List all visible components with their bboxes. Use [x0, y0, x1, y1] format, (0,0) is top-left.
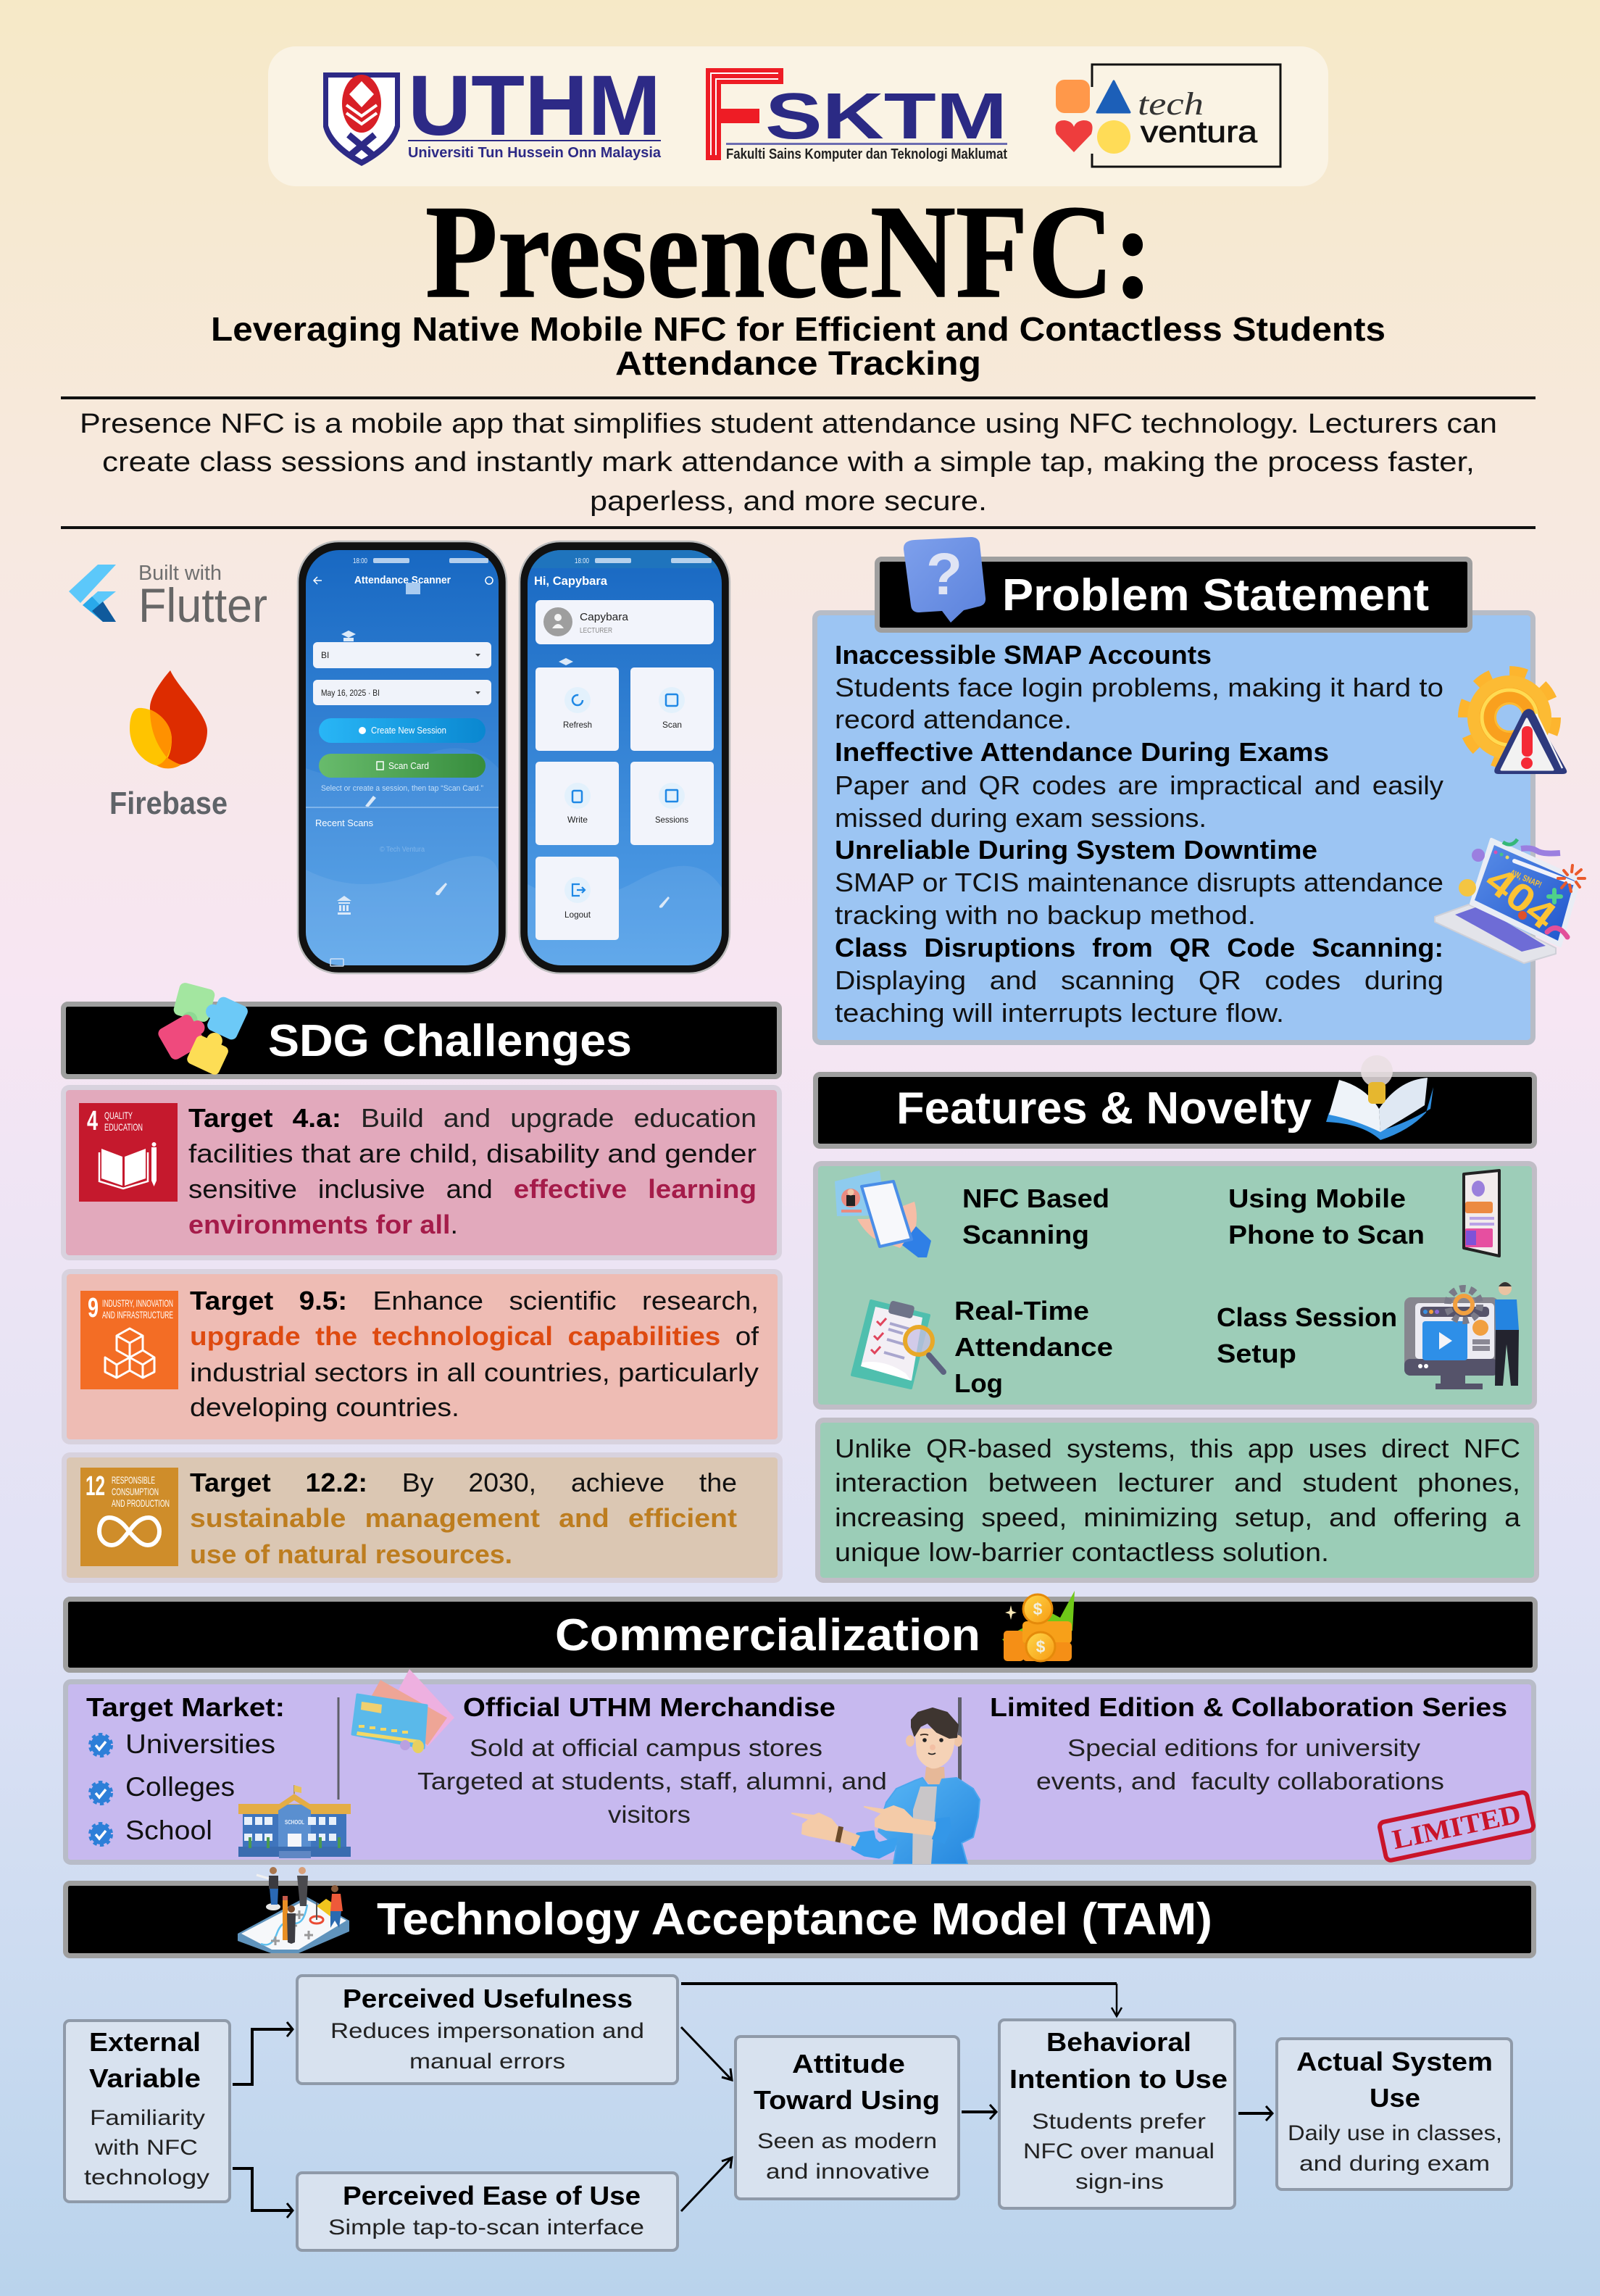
text: official merchandise — [417, 1692, 887, 1828]
problem body text: tracking with no backup method. — [835, 900, 1256, 930]
icon: 404 laptop — [1435, 839, 1585, 963]
icon: phone — [1464, 1170, 1499, 1256]
box: attitude: Toward Using — [754, 2085, 940, 2115]
arrow: external to ease of use — [233, 2168, 293, 2218]
icon: monitor and person — [1404, 1282, 1519, 1389]
problem body text — [835, 640, 1443, 1028]
profile card: LECTURER — [580, 627, 612, 635]
target market: Target Market: — [86, 1692, 285, 1722]
text: official merchandise: Sold at official campus stores — [470, 1734, 822, 1761]
logo: Firebase — [109, 670, 228, 821]
arrow: usefulness to intention — [681, 1984, 1122, 2016]
text: official merchandise: visitors — [608, 1801, 691, 1828]
text: limited edition: events, and faculty collaborations — [1036, 1768, 1444, 1794]
tile: Sessions: Sessions — [655, 815, 688, 825]
logo: tech ventura: ventura — [1141, 115, 1258, 149]
icon: SDG 12: 12 — [86, 1471, 105, 1502]
box: perceived usefulness: Reduces impersonation and — [330, 2019, 644, 2043]
icon: hand with phone — [835, 1170, 931, 1257]
panel: commercialization — [65, 1669, 1534, 1864]
panel: features — [816, 1164, 1535, 1407]
icon: question bubble: ? — [926, 541, 962, 607]
phone: attendance scanner: Select or create a session, then tap “Scan Card.” — [321, 784, 483, 793]
box: external variable: Variable — [89, 2063, 201, 2093]
market list: School — [125, 1815, 212, 1845]
subtitle: Attendance Tracking — [615, 344, 981, 382]
tile: Write: Write — [567, 815, 588, 825]
icon: SDG 9: 9 — [88, 1293, 99, 1323]
tile: Refresh: Refresh — [563, 720, 592, 730]
heading: features and novelty — [816, 1055, 1535, 1147]
panel: novelty text: Unlike QR-based systems, this app uses direct NFC — [835, 1434, 1520, 1463]
icon: SDG 4 — [79, 1103, 178, 1202]
box: behavioral intention: Students prefer — [1032, 2110, 1206, 2134]
box: actual system use: Actual System — [1296, 2047, 1493, 2076]
session dropdowns: May 16, 2025 · BI — [321, 688, 380, 698]
icon: payment cards — [352, 1669, 454, 1753]
problem body text: SMAP or TCIS maintenance disrupts attendance — [835, 868, 1443, 897]
text: target 4.a — [188, 1103, 757, 1239]
problem body text: Class Disruptions from QR Code Scanning: — [835, 933, 1443, 962]
text: target 9.5: developing countries. — [190, 1392, 459, 1422]
arrow: external to usefulness — [233, 2022, 293, 2084]
heading: problem statement: Problem Statement — [1002, 570, 1429, 620]
heading: problem statement — [877, 537, 1470, 631]
stamp: limited — [1379, 1792, 1534, 1861]
icon: school building: SCHOOL — [285, 1819, 304, 1826]
heading: commercialization — [65, 1591, 1535, 1670]
scan card button: Scan Card — [388, 760, 429, 771]
logo: FSKTM: SKTM — [765, 80, 1007, 153]
text: target 4.a: facilities that are child, disability and gender — [188, 1139, 757, 1168]
problem body text: teaching will interrupts lecture flow. — [835, 998, 1284, 1028]
icon: coins with arrow: $ — [1036, 1637, 1046, 1656]
intro paragraph — [80, 409, 1497, 517]
box: actual system use: and during exam — [1299, 2152, 1490, 2176]
icon: SDG 12: AND PRODUCTION — [112, 1497, 170, 1509]
text: using mobile phone: Using Mobile — [1228, 1184, 1406, 1213]
text: using mobile phone — [1228, 1184, 1425, 1249]
text: limited edition: Special editions for university — [1067, 1734, 1421, 1761]
problem body text: Inaccessible SMAP Accounts — [835, 640, 1212, 670]
text: target 9.5: Target 9.5: Enhance scientific research, — [190, 1286, 759, 1315]
market list: Colleges — [125, 1772, 235, 1802]
box: behavioral intention: Behavioral — [1046, 2027, 1191, 2057]
arrow: ease of use to attitude — [681, 2158, 732, 2211]
tile: Refresh — [536, 667, 619, 751]
icon: SDG 4: EDUCATION — [104, 1121, 143, 1133]
subtitle — [211, 310, 1386, 382]
heading: SDG challenges: SDG Challenges — [268, 1016, 632, 1066]
panel: target 12.2 — [64, 1455, 780, 1580]
icon: SDG 4: 4 — [87, 1106, 98, 1136]
box: perceived ease of use — [297, 2173, 678, 2250]
box: behavioral intention: NFC over manual — [1023, 2139, 1214, 2163]
phone: attendance scanner: 18:00 — [353, 557, 367, 565]
icon: SDG 12: CONSUMPTION — [112, 1486, 159, 1497]
text: target 12.2: sustainable management and efficient — [190, 1503, 737, 1533]
problem body text: Students face login problems, making it hard to — [835, 673, 1443, 702]
text: target 9.5: industrial sectors in all countries, particularly — [190, 1357, 759, 1387]
icon: puzzle pieces — [156, 981, 250, 1076]
create session button — [319, 718, 486, 743]
market list — [91, 1729, 275, 1845]
text: real-time attendance log — [954, 1296, 1113, 1398]
icon: gear warning — [1464, 673, 1567, 774]
text: target 12.2 — [190, 1468, 737, 1569]
logo: Flutter — [69, 562, 267, 632]
arrow: usefulness to attitude — [681, 2027, 732, 2080]
logo: FSKTM — [706, 68, 1007, 162]
icon: school building — [238, 1785, 351, 1858]
box: perceived usefulness: manual errors — [409, 2050, 565, 2074]
box: attitude: Seen as modern — [757, 2129, 937, 2153]
box: external variable — [64, 2021, 230, 2202]
panel: novelty text: unique low-barrier contactless solution. — [835, 1537, 1329, 1567]
text: limited edition: Limited Edition & Collaboration Series — [990, 1692, 1507, 1722]
arrow: intention to actual use — [1238, 2106, 1272, 2121]
logo: FSKTM: Fakulti Sains Komputer dan Teknologi Maklumat — [726, 146, 1007, 162]
problem body text: Displaying and scanning QR codes during — [835, 965, 1443, 995]
problem body text: Paper and QR codes are impractical and easily — [835, 770, 1443, 800]
logo: Flutter: Flutter — [138, 578, 267, 632]
box: behavioral intention: Intention to Use — [1009, 2064, 1228, 2094]
title: PresenceNFC: — [425, 178, 1153, 325]
tile: Logout: Logout — [564, 910, 591, 920]
subtitle: Leveraging Native Mobile NFC for Efficient and Contactless Students — [211, 310, 1386, 348]
session dropdowns — [313, 642, 491, 705]
session dropdowns: BI — [321, 650, 329, 660]
tile: Logout — [536, 857, 619, 940]
phone: dashboard: Hi, Capybara — [534, 574, 608, 588]
phone: dashboard: 18:00 — [575, 557, 589, 565]
market list: Universities — [125, 1729, 275, 1759]
text: target 4.a: Target 4.a: Build and upgrade education — [188, 1103, 757, 1133]
heading: commercialization: Commercialization — [555, 1610, 980, 1660]
panel: target 4.a — [64, 1087, 780, 1258]
heading: TAM — [65, 1867, 1533, 1955]
profile card: Capybara — [580, 611, 629, 623]
tile: Sessions — [630, 762, 714, 845]
text: using mobile phone: Phone to Scan — [1228, 1220, 1425, 1249]
box: perceived ease of use: Simple tap-to-scan interface — [328, 2216, 644, 2239]
icon: SDG 12 — [80, 1468, 178, 1566]
box: perceived usefulness: Perceived Usefulness — [343, 1984, 633, 2013]
icon: book and bulb — [1326, 1055, 1433, 1140]
text: official merchandise: Targeted at students, staff, alumni, and — [417, 1768, 887, 1794]
arrow: attitude to intention — [962, 2105, 996, 2119]
heading: TAM: Technology Acceptance Model (TAM) — [377, 1894, 1212, 1944]
phone: attendance scanner — [298, 541, 507, 973]
text: class session setup: Class Session — [1217, 1302, 1397, 1332]
panel: novelty text: interaction between lecturer and student phones, — [835, 1468, 1520, 1497]
text: target 12.2: Target 12.2: By 2030, achieve the — [190, 1468, 737, 1497]
text: target 9.5 — [190, 1286, 759, 1422]
create session button: Create New Session — [371, 725, 446, 736]
stamp: limited: LIMITED — [1390, 1799, 1524, 1855]
heading: SDG challenges — [64, 981, 780, 1077]
text: target 4.a: environments for all . — [188, 1210, 458, 1239]
box: actual system use: Daily use in classes, — [1288, 2121, 1502, 2145]
icon: 404 laptop: 404 — [1478, 858, 1564, 938]
logo: tech ventura: tech — [1138, 86, 1204, 122]
tile: Write — [536, 762, 619, 845]
icon: SDG 12: RESPONSIBLE — [112, 1474, 155, 1486]
text: target 4.a: sensitive inclusive and effective learning — [188, 1174, 757, 1204]
icon: SDG 9 — [80, 1291, 178, 1389]
diagram: TAM flow — [64, 1976, 1512, 2250]
intro paragraph: paperless, and more secure. — [590, 486, 987, 517]
text: NFC based scanning: Scanning — [962, 1220, 1089, 1249]
panel: novelty text — [817, 1421, 1536, 1580]
box: actual system use: Use — [1370, 2083, 1420, 2113]
icon: question bubble — [904, 537, 986, 623]
intro paragraph: Presence NFC is a mobile app that simplifies student attendance using NFC technology. Lecturers can — [80, 409, 1497, 439]
box: behavioral intention — [999, 2020, 1235, 2208]
icon: SDG 9: INDUSTRY, INNOVATION — [102, 1297, 173, 1309]
box: attitude — [736, 2037, 959, 2199]
text: real-time attendance log: Attendance — [954, 1332, 1113, 1362]
icon: 404 laptop: AW, SNAP! — [1509, 868, 1543, 890]
text: NFC based scanning — [962, 1184, 1109, 1249]
box: behavioral intention: sign-ins — [1075, 2170, 1164, 2194]
box: perceived ease of use: Perceived Ease of Use — [343, 2181, 641, 2210]
text: official merchandise: Official UTHM Merchandise — [463, 1692, 836, 1722]
illustration: pointing man — [792, 1708, 980, 1864]
problem body text: missed during exam sessions. — [835, 803, 1207, 833]
icon: coins with arrow — [1002, 1591, 1075, 1661]
logo: UTHM — [323, 58, 662, 166]
panel: problem statement — [814, 613, 1585, 1042]
text: NFC based scanning: NFC Based — [962, 1184, 1109, 1213]
box: actual system use — [1277, 2039, 1512, 2189]
heading: features and novelty: Features & Novelty — [896, 1083, 1312, 1134]
icon: SDG 9: AND INFRASTRUCTURE — [102, 1309, 173, 1320]
panel: novelty text: increasing speed, minimizing setup, and offering a — [835, 1502, 1521, 1532]
box: external variable: External — [89, 2027, 201, 2057]
logo strip — [268, 46, 1328, 186]
icon: SDG 4: QUALITY — [104, 1110, 133, 1121]
problem body text: record attendance. — [835, 704, 1072, 734]
tile: Scan: Scan — [662, 720, 682, 730]
problem body text: Ineffective Attendance During Exams — [835, 737, 1329, 767]
scan card button — [319, 754, 486, 778]
text: target 9.5: upgrade the technological capabilities of — [190, 1321, 759, 1351]
problem body text: Unreliable During System Downtime — [835, 835, 1317, 865]
phone: attendance scanner: Recent Scans — [315, 818, 373, 828]
text: real-time attendance log: Real-Time — [954, 1296, 1089, 1326]
panel: target 9.5 — [64, 1271, 780, 1442]
icon: clipboard with magnifier — [852, 1300, 943, 1388]
logo: tech ventura — [1055, 65, 1280, 167]
intro paragraph: create class sessions and instantly mark attendance with a simple tap, making the process faster, — [102, 447, 1475, 478]
target market — [86, 1692, 285, 1845]
logo: UTHM: UTHM — [408, 58, 661, 154]
box: attitude: and innovative — [766, 2160, 930, 2184]
logo: UTHM: Universiti Tun Hussein Onn Malaysia — [408, 145, 662, 161]
box: external variable: with NFC — [94, 2136, 198, 2160]
logo: Flutter: Built with — [138, 562, 222, 585]
text: class session setup — [1217, 1302, 1397, 1368]
phone: attendance scanner: © Tech Ventura — [380, 846, 425, 854]
box: perceived usefulness — [297, 1976, 678, 2084]
icon: isometric team on phone — [238, 1867, 349, 1953]
text: target 12.2: use of natural resources. — [190, 1539, 512, 1569]
icon: coins with arrow: $ — [1033, 1600, 1043, 1618]
screen heading: Attendance Scanner — [354, 574, 451, 586]
box: external variable: Familiarity — [90, 2106, 205, 2130]
box: external variable: technology — [84, 2166, 209, 2189]
text: real-time attendance log: Log — [954, 1368, 1003, 1398]
profile card — [536, 600, 714, 644]
phone: dashboard — [520, 541, 730, 973]
text: class session setup: Setup — [1217, 1339, 1296, 1368]
box: attitude: Attitude — [792, 2049, 905, 2079]
tile: Scan — [630, 667, 714, 751]
logo: Firebase: Firebase — [109, 786, 228, 821]
text: limited edition — [990, 1692, 1507, 1794]
